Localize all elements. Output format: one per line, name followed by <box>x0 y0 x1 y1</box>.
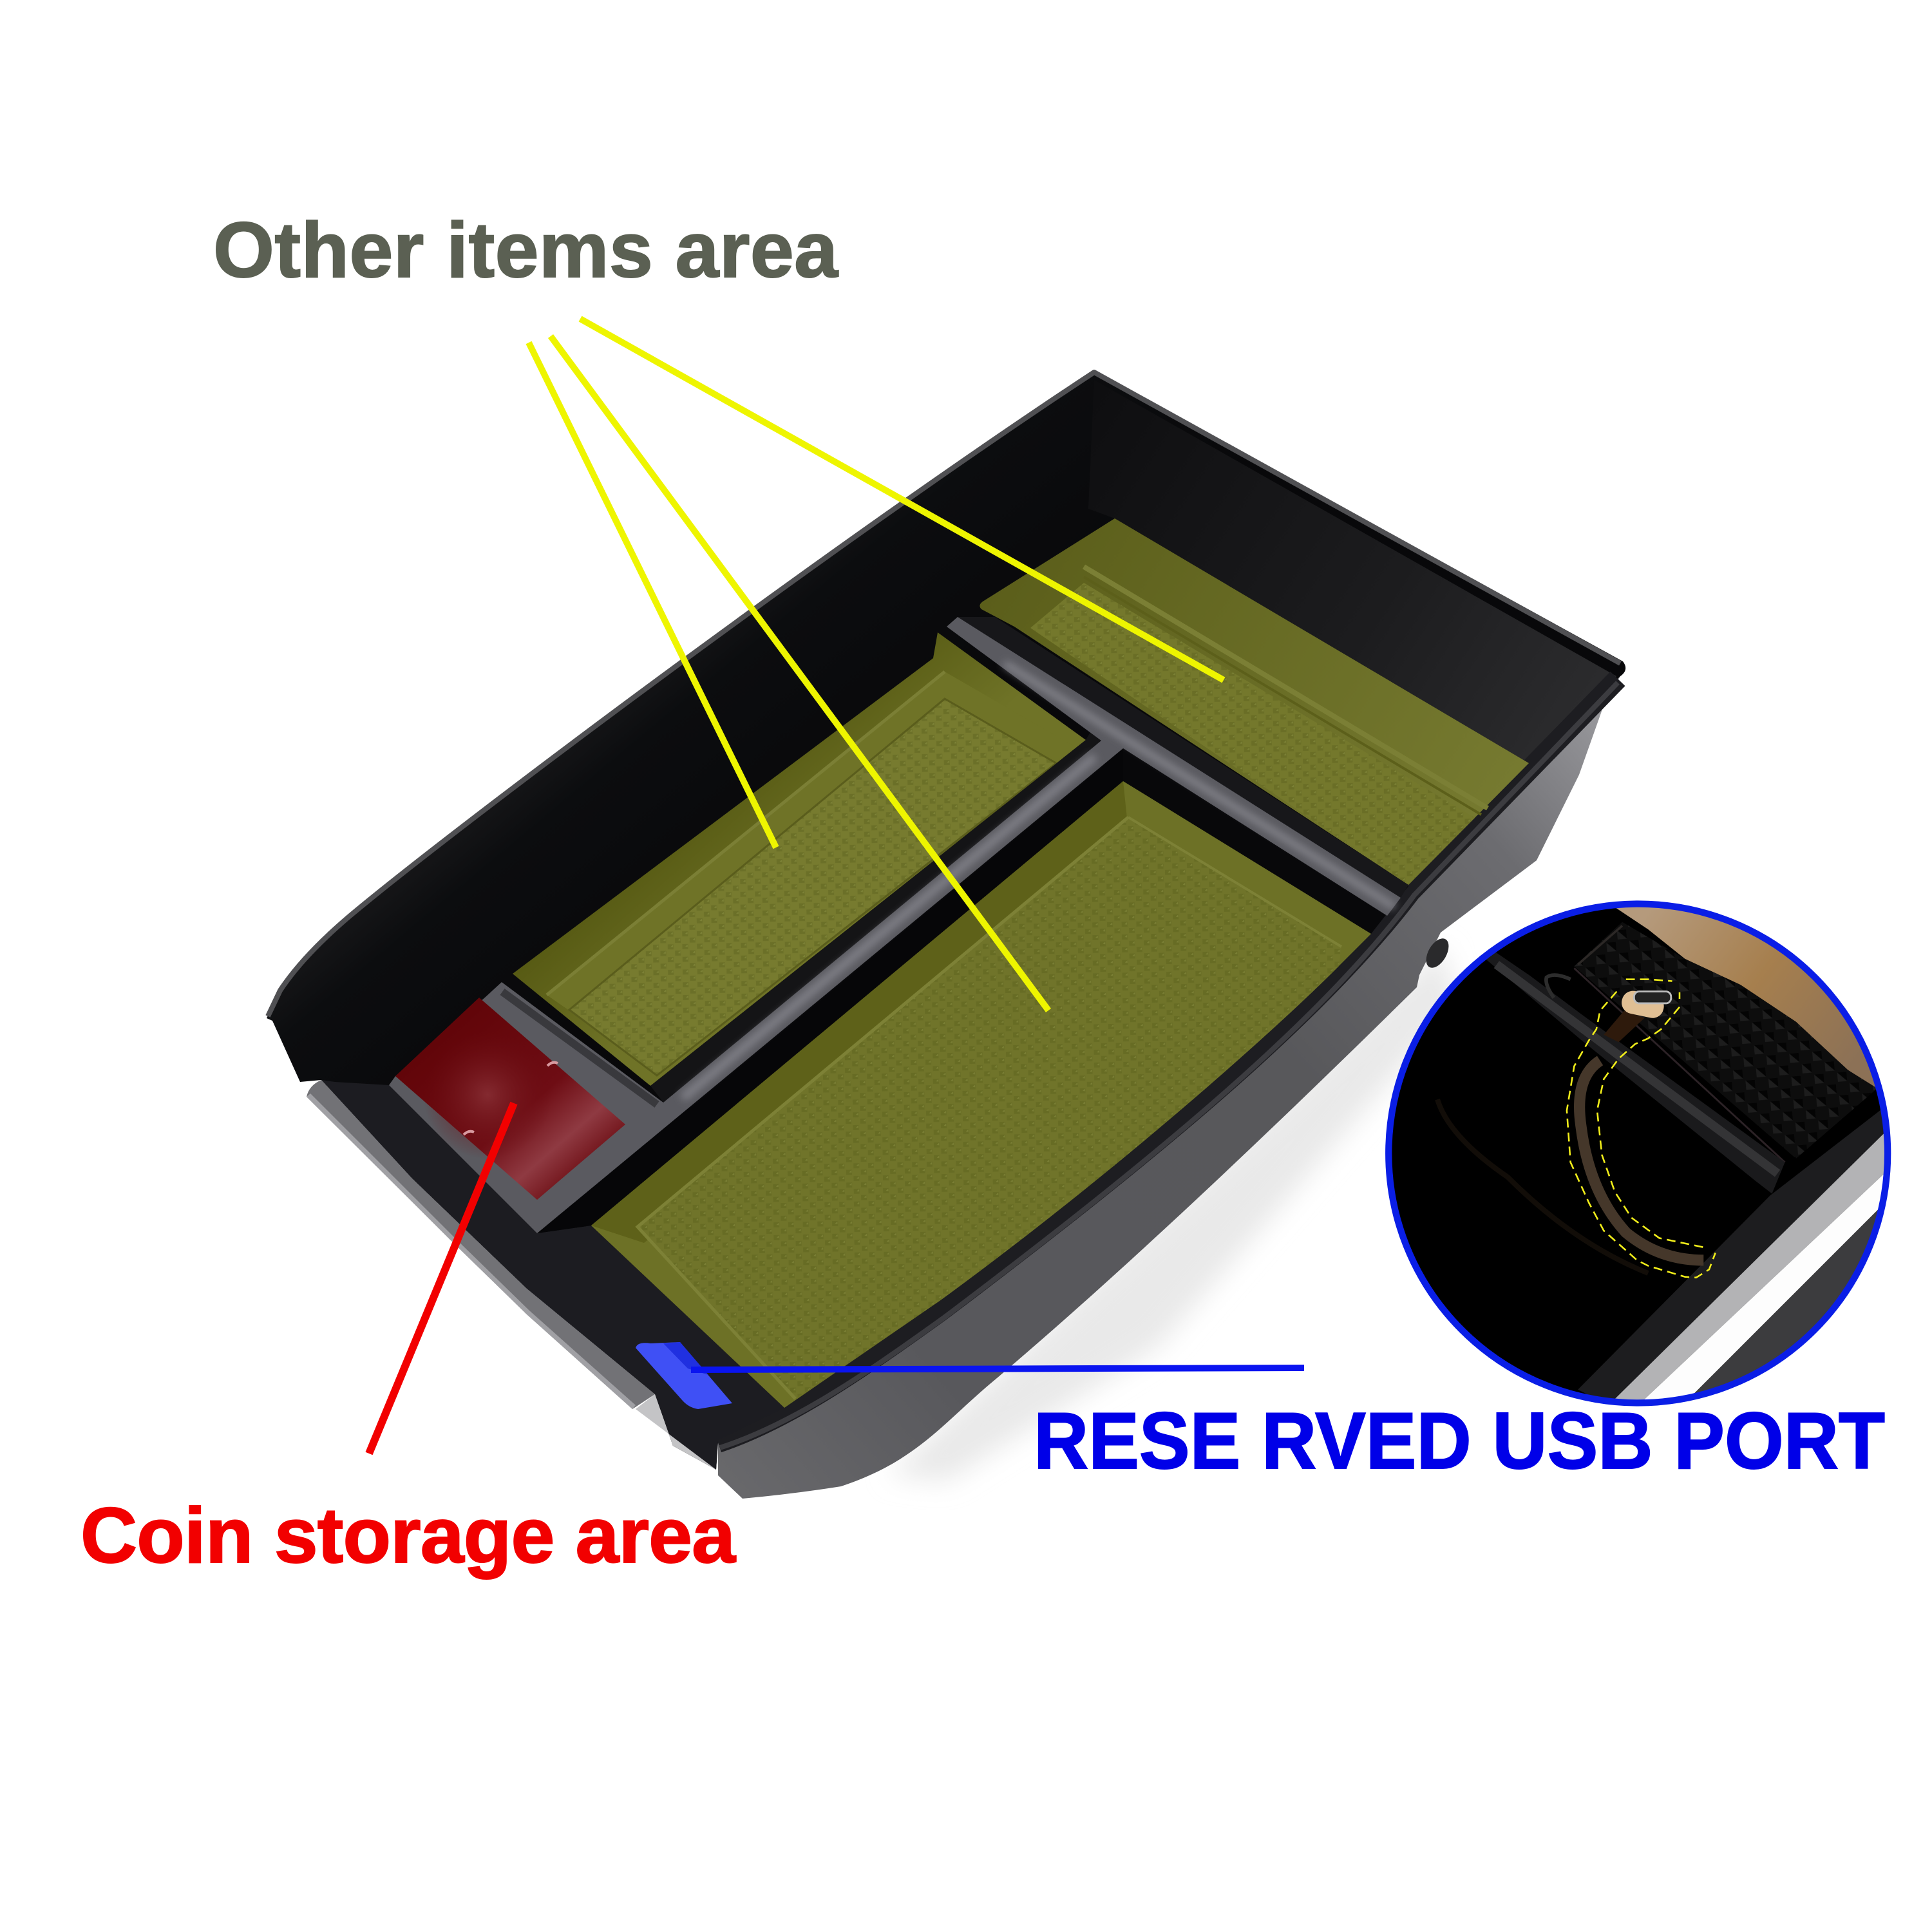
label: coin storage area: Coin storage area <box>80 1492 736 1579</box>
console tray <box>267 370 1625 1499</box>
tray interior <box>267 370 1625 1470</box>
USB port opening <box>636 1342 732 1409</box>
rim highlight <box>268 372 1620 1016</box>
dark strip beside pad <box>650 724 1101 1103</box>
heading: other items area: Other items area <box>213 206 838 294</box>
infographic canvas <box>83 220 1891 1580</box>
leader line: coin storage <box>369 1103 514 1454</box>
front corner <box>636 1394 716 1470</box>
inset: braided cable <box>1580 1061 1703 1260</box>
side wall hole <box>1421 934 1454 972</box>
label: reserved USB port: RESE RVED USB PORT <box>1034 1397 1885 1486</box>
tray shadow <box>889 947 1457 1481</box>
coin storage recess <box>395 998 625 1200</box>
inset: faint cable <box>1437 1099 1648 1273</box>
divider T-bar <box>389 617 1401 1233</box>
pad: upper right <box>980 518 1529 885</box>
leader lines: other items area <box>529 319 1224 1010</box>
inset: USB-C plug <box>1604 989 1671 1042</box>
floor front <box>321 1080 784 1470</box>
inset: divider strip <box>1486 952 1785 1194</box>
front right rim <box>718 679 1618 1448</box>
inset: tray wall bands <box>1578 1107 1892 1406</box>
inset: hook <box>1546 975 1571 998</box>
inset: tan object <box>1616 907 1875 1087</box>
bar shadow channel <box>1123 747 1408 934</box>
inset: dashed cable outline <box>1567 980 1716 1278</box>
leader line: USB port <box>691 1368 1304 1370</box>
back right wall <box>1088 380 1616 763</box>
inset: blue ring <box>1388 904 1888 1403</box>
inset: USB port close-up <box>1386 900 1907 1406</box>
tray outer side wall <box>718 676 1620 1499</box>
inset: textured mat <box>1574 922 1877 1159</box>
pad: large front <box>591 781 1371 1408</box>
front left rim <box>307 1080 655 1409</box>
dark textured band beside upper pad <box>958 617 1408 898</box>
pad: upper left <box>513 632 1086 1086</box>
